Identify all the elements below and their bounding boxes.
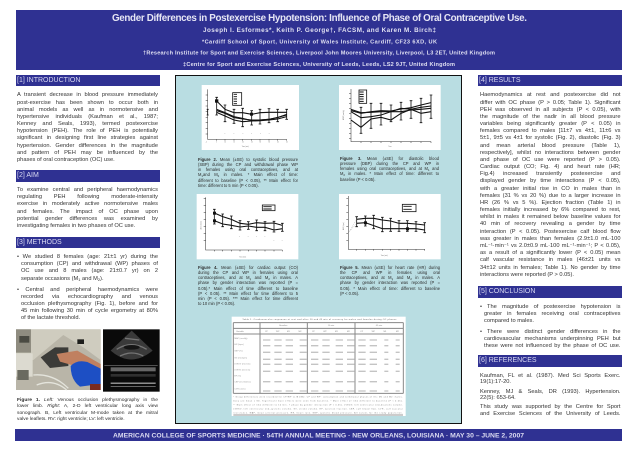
table 1: 45 min [376, 325, 383, 327]
table 1: M1 [335, 331, 339, 333]
chart: figure 2 systolic blood pressure: Time (min) [242, 146, 249, 148]
text: results: HR (26 % vs 5 %). Ejection fraction (Table 1) in [480, 200, 620, 206]
text: results: 34±12 units in females; Table 1). No gender by time [480, 265, 620, 271]
table footnote: ** Main effect of time different to 10 min. † phase by gender interaction (P < 0.05). LVEDV, left ventricular end-diastolic volume. [233, 403, 403, 406]
text: conclusion bullet 1: compared to males. [484, 318, 534, 324]
text: results: and phase of OC use were reported (P > 0.05). [480, 157, 620, 163]
table values [263, 340, 402, 391]
caption: figure 5 [340, 264, 440, 296]
text: introduction [17, 92, 158, 163]
caption: figure 3: females using oral contraceptives, and at M1 and [340, 166, 439, 172]
text: results: Haemodynamics at rest and postexercise did not [480, 92, 620, 98]
text: introduction: and pattern of PEH may be influenced by the [17, 150, 158, 156]
text: results: as a result of a significantly lower (P < 0.05) mean [480, 250, 620, 256]
affiliation 2: †Research Institute for Sport and Exercise Sciences, Liverpool John Moores University, Liverpool, L3 2ET, United Kingdom [143, 51, 495, 57]
text: conclusion bullet 1: greater in females receiving oral contraceptives [484, 311, 620, 317]
text: methods bullet 2: • Central and peripheral haemodynamics were [17, 286, 158, 292]
text: acknowledgement: and Exercise Sciences of the University of Leeds. [480, 411, 620, 417]
heading: introduction: [1] INTRODUCTION [17, 77, 80, 84]
caption: figure 4: min (P < 0.05). *** Main effect for time different [198, 296, 298, 301]
caption: figure 2: M1and M2 in males. * Main effect of time: [198, 172, 298, 178]
text: results: Cardiac output (CO; Fig. 4) and heart rate (HR; [480, 164, 620, 170]
table footnote: resistance. MAP, mean arterial pressure. HR, heart rate. SBP, systolic blood pressure. All values for the study population. [233, 412, 403, 415]
table footnote: * Group differences were recorded for CP/WP vs M1/M2. CP and WP: consumption and withdrawal phases of OC; M1 and M2: males. [233, 395, 403, 398]
caption: figure 5: the CP and WP in females using oral [340, 270, 440, 275]
text: results: females (31 % vs 20 %) due to a larger increase in [480, 193, 620, 199]
table 1: Table 1. Cardiovascular responses at rest and after 10 and 45 min of recovery for males and females during OC phases [242, 318, 396, 321]
caption: figure 4: contraceptives, and at M1 and M2 in males. A [198, 275, 298, 281]
text: results: PEH was observed in all subjects (P < 0.05), with [480, 107, 620, 113]
text: methods bullet 2: 45 min following 30 min of cycle ergometry at 80% [21, 308, 158, 314]
text: results: 40 min of recovery revealing a gender by time [480, 221, 620, 227]
table 1: SBP (%) [234, 350, 243, 352]
text: reference 2: 22(5): 653-64. [480, 395, 516, 401]
caption: figure 1: lower limb. Right: A, 2-D left ventricular long axis view [17, 404, 158, 409]
title: Gender Differences in Postexercise Hypotension: Influence of Phase of Oral Contraceptive Use. [112, 13, 527, 24]
photo: venous occlusion plethysmography [16, 329, 101, 390]
heading: introduction [16, 75, 160, 86]
heading: conclusion [478, 286, 622, 298]
caption: figure 5: phase by gender interaction was reported (P = [340, 280, 440, 285]
caption: figure 5: 0.05). * Main effect of time: different to baseline [340, 286, 440, 290]
chart: figure 2 systolic blood pressure [202, 85, 299, 150]
table 1: LVESV (mL/min) [234, 370, 251, 372]
chart: figure 4 cardiac output: Time (min) [239, 256, 247, 258]
text: results: differ with OC phase (P > 0.05; Table 1). Significant [480, 100, 620, 106]
text: acknowledgement [480, 404, 620, 417]
text: results: with a greater initial rise in CO in males than in [480, 186, 620, 192]
table 1: EF (%) [234, 375, 241, 377]
chart: figure 2 systolic blood pressure: 15 [233, 142, 235, 144]
caption: figure 3: Figure 3. Mean (±SE) for diastolic blood [340, 156, 439, 160]
table 1: CVR (units) [234, 388, 246, 391]
table 1: M2 [347, 331, 351, 333]
caption: figure 5: Figure 5. Mean (±SE) for heart rate (HR) during [340, 264, 440, 270]
caption: figure 5: contraceptives, and at M1 and M2 in males. A [340, 275, 440, 281]
heading: aim [16, 170, 160, 182]
text: aim: exercise in moderately active normotensive males [17, 201, 158, 207]
caption: figure 1: sonograph. B, Left ventricular M-mode taken at the mitral [17, 411, 158, 416]
text: methods bullet 1: consumption (CP) and withdrawal (WP) phases of [21, 261, 158, 267]
table footnote: LVESV, left ventricular end-systolic volume. SV, stroke volume. EF, ejection fraction. CBF, calf blood flow. CVR, calf vascular [233, 407, 403, 410]
text: methods bullet 1 [17, 254, 158, 282]
text: introduction: A transient decrease in blood pressure immediately [17, 92, 158, 98]
text: results: 5±1, 9±5 vs 4±1 for systolic (Fig. 2), diastolic (Fig. 3) [480, 135, 620, 141]
caption: figure 4: (P < 0.05). ** Main effect for time different to 5 [198, 291, 298, 296]
text: acknowledgement: This study was supported by the Centre for Sport [480, 404, 620, 410]
caption: figure 4: 0.05).* Main effect of time different to baseline [198, 286, 298, 290]
table 1: M1 [384, 331, 387, 333]
table 1: 10 min [328, 325, 335, 327]
caption: figure 2: different to baseline (P < 0.05), ** Main effect for [198, 178, 298, 182]
text: results: the magnitude of the nadir in all blood pressure [480, 114, 620, 120]
text: results [480, 92, 620, 278]
text: introduction: hypertension. Gender differences in the magnitude [17, 143, 158, 149]
chart: figure 2 systolic blood pressure: 5 [216, 142, 217, 144]
chart: figure 4 cardiac output [196, 194, 298, 260]
text: methods bullet 2: occlusion plethysmography (Fig. 1), before and for [21, 301, 158, 307]
text: introduction: post-exercise has been shown to occur both in [17, 100, 158, 106]
text: introduction: phases of oral contraception (OC) use. [17, 157, 115, 163]
text: aim: regulating PEH following moderate-intensity [17, 194, 158, 200]
table 1: CP [312, 331, 315, 333]
chart: figure 5 heart rate [339, 194, 441, 260]
text: methods bullet 2 [17, 286, 158, 321]
chart: figure 2 systolic blood pressure: 20 [242, 142, 244, 144]
authors: Joseph I. Esformes*, Keith P. George†, FACSM, and Karen M. Birch‡ [203, 27, 436, 34]
text: introduction: significant in designing first line strategies against [17, 135, 158, 141]
text: methods bullet 1: separate occasions (M1 and M2). [21, 276, 104, 282]
chart: figure 5 heart rate: Time (min) [381, 255, 388, 257]
chart: figure 2 systolic blood pressure: 45 [286, 142, 288, 144]
text: aim [17, 187, 158, 229]
table 1: HR (bpm) [234, 344, 244, 346]
text: results: females compared to males [11±7 vs 4±1, 11±6 vs [480, 128, 620, 134]
chart: figure 5 heart rate: ΔHR (bpm) [342, 222, 345, 230]
text: results: respectively], whilst no interactions between gender [480, 150, 620, 156]
photo: ultrasound sonograph [103, 329, 160, 392]
caption: figure 4: phase by gender interaction was reported (P = [198, 280, 298, 285]
caption: figure 2 [198, 156, 298, 188]
chart: figure 2 systolic blood pressure: -5 [206, 142, 207, 144]
table 1: CBF (mL/100mL) [234, 381, 251, 383]
caption: figure 2: in females using oral contraceptives, and at [198, 167, 298, 172]
text: introduction: hypertensive individuals (Kaufman et al., 1987; [17, 114, 158, 120]
table footnote: Data are mean ± SD. Significant main effects were seen from baseline. * Main effect of time different to baseline (P < 0.05). [233, 399, 403, 402]
text: aim: To examine central and peripheral haemodynamics [17, 187, 158, 193]
caption: figure 1 [17, 398, 158, 422]
heading: references [478, 355, 622, 367]
chart: figure 3 diastolic blood pressure: Time [388, 146, 392, 148]
text: conclusion bullet 2: cardiovascular mechanisms underpinning PEH but [484, 336, 620, 342]
caption: figure 3: pressure (DBP) during the CP and WP in [340, 161, 439, 166]
affiliation 3: ‡Centre for Sport and Exercise Sciences, University of Leeds, Leeds, LS2 9JT, United Kingdom [183, 62, 455, 68]
text: results: calf vascular resistance in males (46±21 units vs [480, 257, 620, 263]
affiliation 1: *Cardiff School of Sport, University of Wales Institute, Cardiff, CF23 6XD, UK [202, 40, 437, 46]
table 1: WP [372, 331, 376, 333]
caption: figure 5: (P < 0.05). [340, 291, 359, 296]
table 1: WP [323, 331, 327, 333]
heading: methods: [3] METHODS [17, 239, 62, 246]
figure 1 photographs [16, 329, 160, 392]
text: results: whilst in males it remained below baseline values for [480, 214, 620, 220]
chart: figure 2 systolic blood pressure: 10 [224, 142, 226, 144]
chart: figure 2 systolic blood pressure: 30 [259, 142, 261, 144]
caption: figure 4: during the CP and WP in females using oral [198, 270, 298, 275]
caption: figure 3: baseline (P < 0.05). [340, 176, 376, 182]
text: conclusion bullet 2: • There were distinct gender differences in the [480, 328, 620, 334]
text: aim: and females. The impact of OC phase upon [17, 209, 158, 215]
chart: figure 3 diastolic blood pressure [339, 85, 441, 150]
chart: figure 4 cardiac output: ΔCO (L/min) [200, 220, 203, 229]
chart: figure 2 systolic blood pressure: 25 [251, 142, 253, 144]
caption: figure 2: time: different to 5 min (P < 0.05). [198, 183, 259, 188]
text: results: interaction (P < 0.05). Postexercise calf blood flow [480, 229, 620, 235]
table 1: MAP (mmHg) [234, 337, 248, 340]
text: aim: investigating females in two phases of OC use. [17, 223, 135, 229]
caption: figure 2: Figure 2. Mean (±SE) to systolic blood pressure [198, 156, 298, 162]
text: results: and mean arterial blood pressure (Table 1), [480, 143, 620, 149]
text: results: females initially increased by 6% compared to rest, [480, 207, 620, 213]
text: reference 2 [480, 388, 620, 401]
text: aim: potential gender differences was examined by [17, 216, 158, 222]
panel: results figures [175, 75, 462, 424]
text: results: Fig.4) increased transiently postexercise and [480, 171, 620, 177]
heading: aim: [2] AIM [17, 172, 39, 179]
text: reference 1: Kaufman, FL et al. (1987). Med Sci Sports Exerc. [480, 372, 620, 378]
text: conclusion bullet 2 [480, 328, 620, 349]
chart: figure 2 systolic blood pressure: 40 [277, 142, 279, 144]
table 1: LVEDV (mL/min) [234, 364, 251, 366]
heading: methods [16, 237, 160, 248]
table 1: Variable [236, 330, 245, 333]
table 1: CP [265, 331, 268, 333]
text: conclusion bullet 1: • The magnitude of postexercise hypotension is [480, 304, 620, 310]
text: reference 1: 19(1):17-20. [480, 379, 511, 385]
text: reference 2: Kenney, MJ & Seals, DR (1993). Hypertension. [480, 388, 620, 394]
caption: figure 1: valve leaflets. RV: right ventricle; LV: left ventricle. [17, 417, 125, 422]
heading: results: [4] RESULTS [479, 77, 520, 84]
text: methods bullet 2: of the lactate threshold. [21, 315, 80, 321]
footer banner: AMERICAN COLLEGE OF SPORTS MEDICINE · 54TH ANNUAL MEETING · NEW ORLEANS, LOUISIANA · MAY 30 – JUNE 2, 2007 [113, 433, 524, 440]
caption: figure 4: to 10 min (P < 0.05). [198, 301, 235, 306]
text: results: was greater in males than females (2.9±1.0 mL·100 [480, 236, 620, 242]
text: conclusion bullet 2: these were not influenced by the phase of OC use. [484, 343, 620, 349]
text: introduction: animal models as well as in normotensive and [17, 107, 158, 113]
caption: figure 4: Figure 4. Mean (±SE) for cardiac output (CO) [198, 264, 298, 270]
caption: figure 1: Figure 1. Left: Venous occlusion plethysmography in the [17, 398, 158, 403]
table 1: WP [276, 331, 280, 333]
table footnote [233, 395, 403, 415]
table 1: Baseline [279, 325, 288, 327]
text: results: interactions were reported (P > 0.05). [480, 272, 574, 278]
text: introduction: hypotension (PEH). The role of PEH is potentially [17, 128, 158, 134]
text: methods bullet 1: • We studied 8 females (age: 21±1 yr) during the [17, 254, 158, 260]
table 1: M2 [396, 331, 400, 333]
header banner [16, 10, 622, 70]
caption: figure 4 [198, 264, 298, 306]
table 1: M2 [298, 331, 302, 333]
text: methods bullet 2: recorded via echocardiography and venous [21, 294, 158, 300]
text: methods bullet 1: OC use and 8 males (age: 21±0.7 yr) on 2 [21, 268, 158, 274]
text: reference 1 [480, 372, 620, 385]
heading: references: [6] REFERENCES [479, 357, 537, 364]
table 1: SV (mL/bpm) [234, 357, 247, 359]
text: results: mL⁻¹·min⁻¹ vs 2.0±0.9 mL·100 mL⁻¹·min⁻¹; P < 0.05), [480, 243, 620, 249]
caption: figure 2: (SBP) during the CP and withdrawal phase WP [198, 162, 298, 167]
table 1: CP [360, 331, 364, 333]
heading: conclusion: [5] CONCLUSION [479, 288, 535, 295]
caption: figure 3 [340, 156, 439, 182]
chart: figure 3 diastolic blood pressure: ΔDBP (mmHg) [342, 110, 345, 120]
chart: figure 2 systolic blood pressure: 35 [268, 142, 270, 144]
table 1: M1 [287, 331, 291, 333]
text: results: displayed gender by time interactions (P < 0.05), [480, 178, 620, 184]
table 1 [232, 316, 406, 416]
text: results: variables being significantly greater (P < 0.05) in [480, 121, 620, 127]
text: introduction: Kenney and Seals, 1993), termed postexercise [17, 121, 158, 127]
text: conclusion bullet 1 [480, 304, 620, 324]
footer banner [15, 429, 622, 441]
caption: figure 3: M2 in males. * Main effect of time: different to [340, 171, 439, 177]
heading: results [478, 75, 622, 86]
